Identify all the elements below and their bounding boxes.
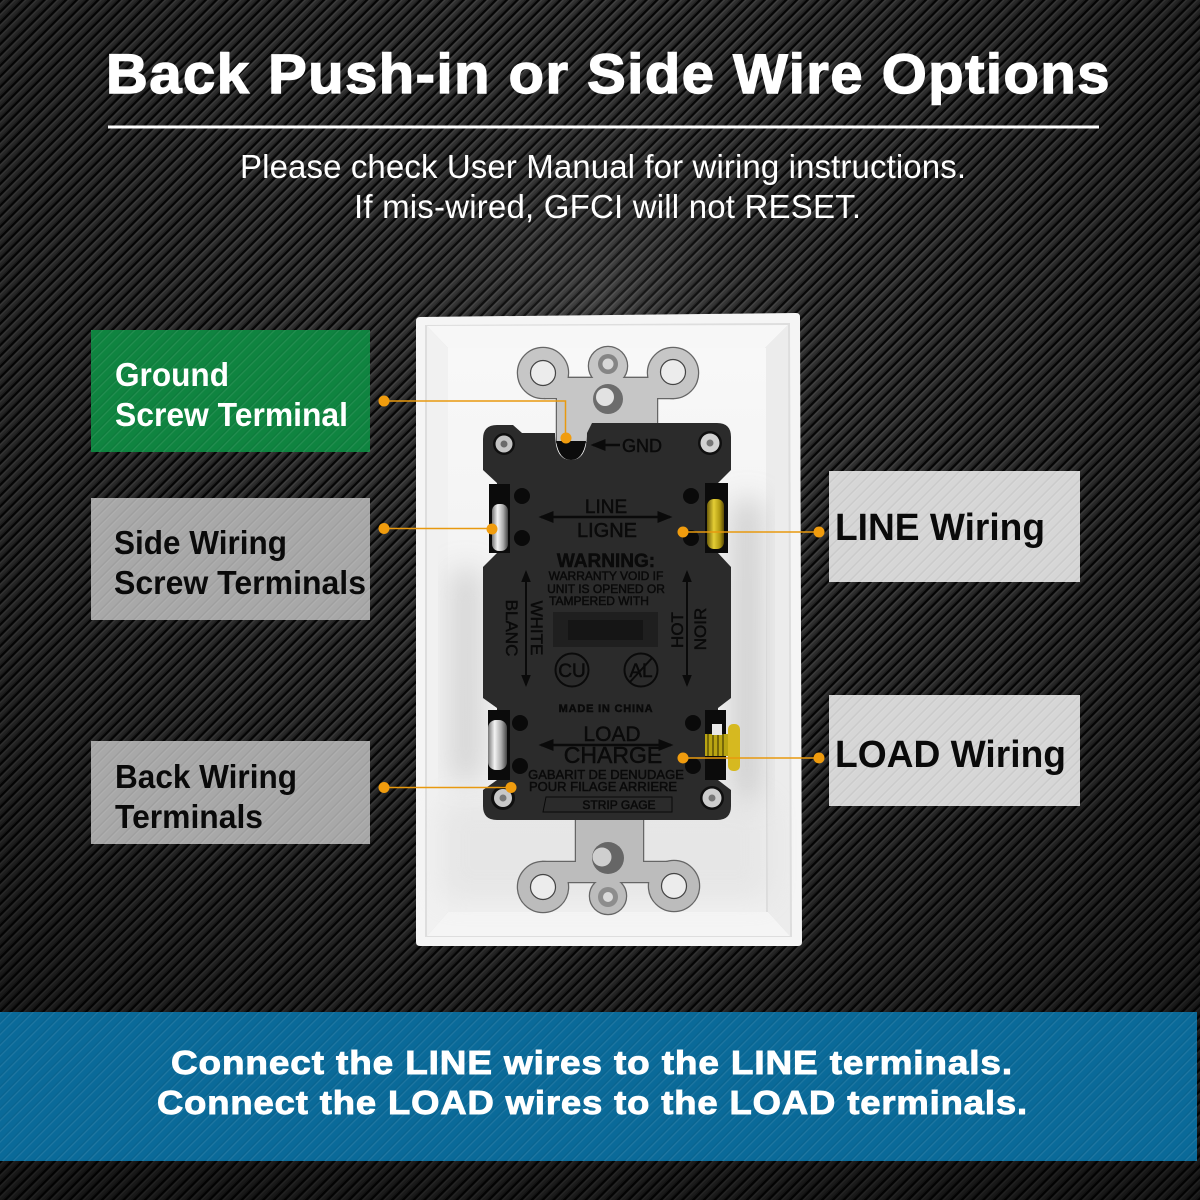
- side terminal recesses: [488, 483, 728, 780]
- wall plate with GFCI back: [416, 313, 802, 946]
- side screw: upper left silver: [492, 504, 508, 551]
- label: back wiring terminals: Terminals: [115, 798, 263, 835]
- moulded markings on body: GND: [622, 436, 662, 456]
- moulded markings on body: WHITE: [527, 601, 546, 655]
- label: back wiring terminals: Back Wiring: [115, 758, 297, 795]
- moulded markings on body: CU: [558, 661, 586, 682]
- banner text: [157, 1044, 1028, 1121]
- label: ground screw terminal: Screw Terminal: [115, 396, 348, 433]
- subtitle: [240, 148, 966, 225]
- plate outer frame: [416, 313, 802, 946]
- moulded markings on body: CHARGE: [564, 742, 662, 768]
- GFCI black body: [483, 423, 731, 820]
- label: ground screw terminal: [91, 330, 370, 452]
- moulded markings on body: UNIT IS OPENED OR: [547, 582, 665, 596]
- moulded markings on body: MADE IN CHINA: [559, 703, 653, 715]
- label: LINE wiring: [829, 471, 1080, 582]
- moulded markings on body: NOIR: [691, 608, 710, 650]
- subtitle: If mis-wired, GFCI will not RESET.: [354, 188, 861, 225]
- moulded markings on body: STRIP GAGE: [582, 798, 656, 812]
- label: side wiring screw terminals: [91, 498, 370, 620]
- moulded markings on body: [502, 436, 710, 812]
- moulded markings on body: LIGNE: [577, 520, 637, 542]
- callout: back wiring: [378, 782, 516, 793]
- moulded markings on body: BLANC: [502, 600, 521, 656]
- label: LOAD wiring: [829, 695, 1080, 806]
- moulded markings on body: TAMPERED WITH: [549, 594, 649, 608]
- top mounting strap: [518, 347, 698, 442]
- callout: LINE wiring: [678, 526, 824, 538]
- callout: side wiring: [378, 523, 498, 534]
- callout lines and dots: [378, 396, 824, 793]
- label: ground screw terminal: Ground: [115, 356, 229, 393]
- bottom mounting strap: [518, 818, 699, 914]
- callout: LOAD wiring: [678, 752, 824, 764]
- banner text: Connect the LINE wires to the LINE terminals.: [171, 1044, 1013, 1081]
- side screw: lower right brass: [705, 724, 740, 771]
- side screw: lower left silver: [488, 720, 507, 770]
- moulded markings on body: HOT: [668, 612, 687, 648]
- callout: ground: [378, 396, 572, 444]
- moulded markings on body: AL: [629, 661, 653, 682]
- plate bevel: [425, 323, 792, 937]
- banner text: Connect the LOAD wires to the LOAD terminals.: [157, 1084, 1028, 1121]
- corner screws: [491, 431, 724, 810]
- moulded markings on body: LINE: [585, 497, 627, 518]
- moulded markings on body: LOAD: [583, 723, 641, 746]
- moulded markings on body: WARRANTY VOID IF: [549, 569, 663, 583]
- bottom blue banner: [0, 1012, 1197, 1161]
- title rule: [108, 126, 1099, 128]
- label: side wiring screw terminals: Side Wiring: [114, 524, 287, 561]
- label: side wiring screw terminals: Screw Terminals: [114, 564, 366, 601]
- back wire holes: [512, 488, 701, 774]
- subtitle: Please check User Manual for wiring instructions.: [240, 148, 966, 185]
- side screw: upper right brass: [707, 499, 724, 549]
- label: LOAD wiring: LOAD Wiring: [835, 734, 1066, 776]
- label: back wiring terminals: [91, 741, 370, 844]
- title: Back Push-in or Side Wire Options: [106, 42, 1111, 105]
- label: LINE wiring: LINE Wiring: [835, 507, 1045, 549]
- moulded markings on body: WARNING:: [557, 551, 655, 572]
- moulded markings on body: GABARIT DE DENUDAGE: [528, 767, 684, 782]
- moulded markings on body: POUR FILAGE ARRIERE: [529, 779, 677, 794]
- ground slot: [556, 441, 586, 460]
